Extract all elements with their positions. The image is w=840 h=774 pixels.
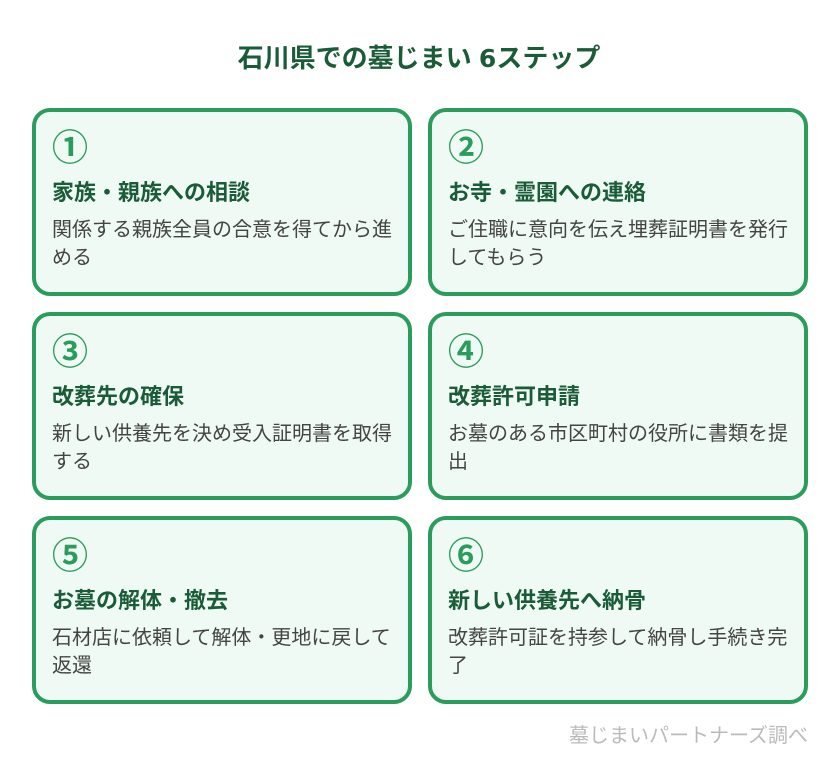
step 1 heading: 家族・親族への相談	[52, 180, 250, 205]
step 5 description: 石材店に依頼して解体・更地に戻して返還	[52, 627, 391, 677]
step number 5: ⑤	[52, 535, 88, 576]
step number 3: ③	[52, 331, 88, 372]
step 2 description: ご住職に意向を伝え埋葬証明書を発行してもらう	[448, 219, 788, 269]
step 6 heading: 新しい供養先へ納骨	[448, 588, 646, 613]
step number 4: ④	[448, 331, 484, 372]
step number 1: ①	[52, 127, 88, 168]
step 5 heading: お墓の解体・撤去	[52, 588, 228, 613]
step 4 description: お墓のある市区町村の役所に書類を提出	[448, 423, 788, 473]
step 1 description: 関係する親族全員の合意を得てから進める	[52, 219, 392, 269]
panel: step 5	[32, 516, 412, 704]
step 3 description: 新しい供養先を決め受入証明書を取得する	[52, 423, 392, 473]
panel: step 3	[32, 312, 412, 500]
panel: step 4	[428, 312, 808, 500]
step 6 description: 改葬許可証を持参して納骨し手続き完了	[448, 627, 787, 677]
panel: step 1	[32, 108, 412, 296]
panel: step 2	[428, 108, 808, 296]
title: 石川県での墓じまい 6ステップ	[238, 43, 600, 73]
step number 2: ②	[448, 127, 484, 168]
step 4 heading: 改葬許可申請	[448, 384, 580, 409]
step 3 heading: 改葬先の確保	[52, 384, 184, 409]
step 2 heading: お寺・霊園への連絡	[448, 180, 646, 205]
panel: step 6	[428, 516, 808, 704]
source note: 墓じまいパートナーズ調べ	[569, 725, 808, 747]
step number 6: ⑥	[448, 535, 484, 576]
